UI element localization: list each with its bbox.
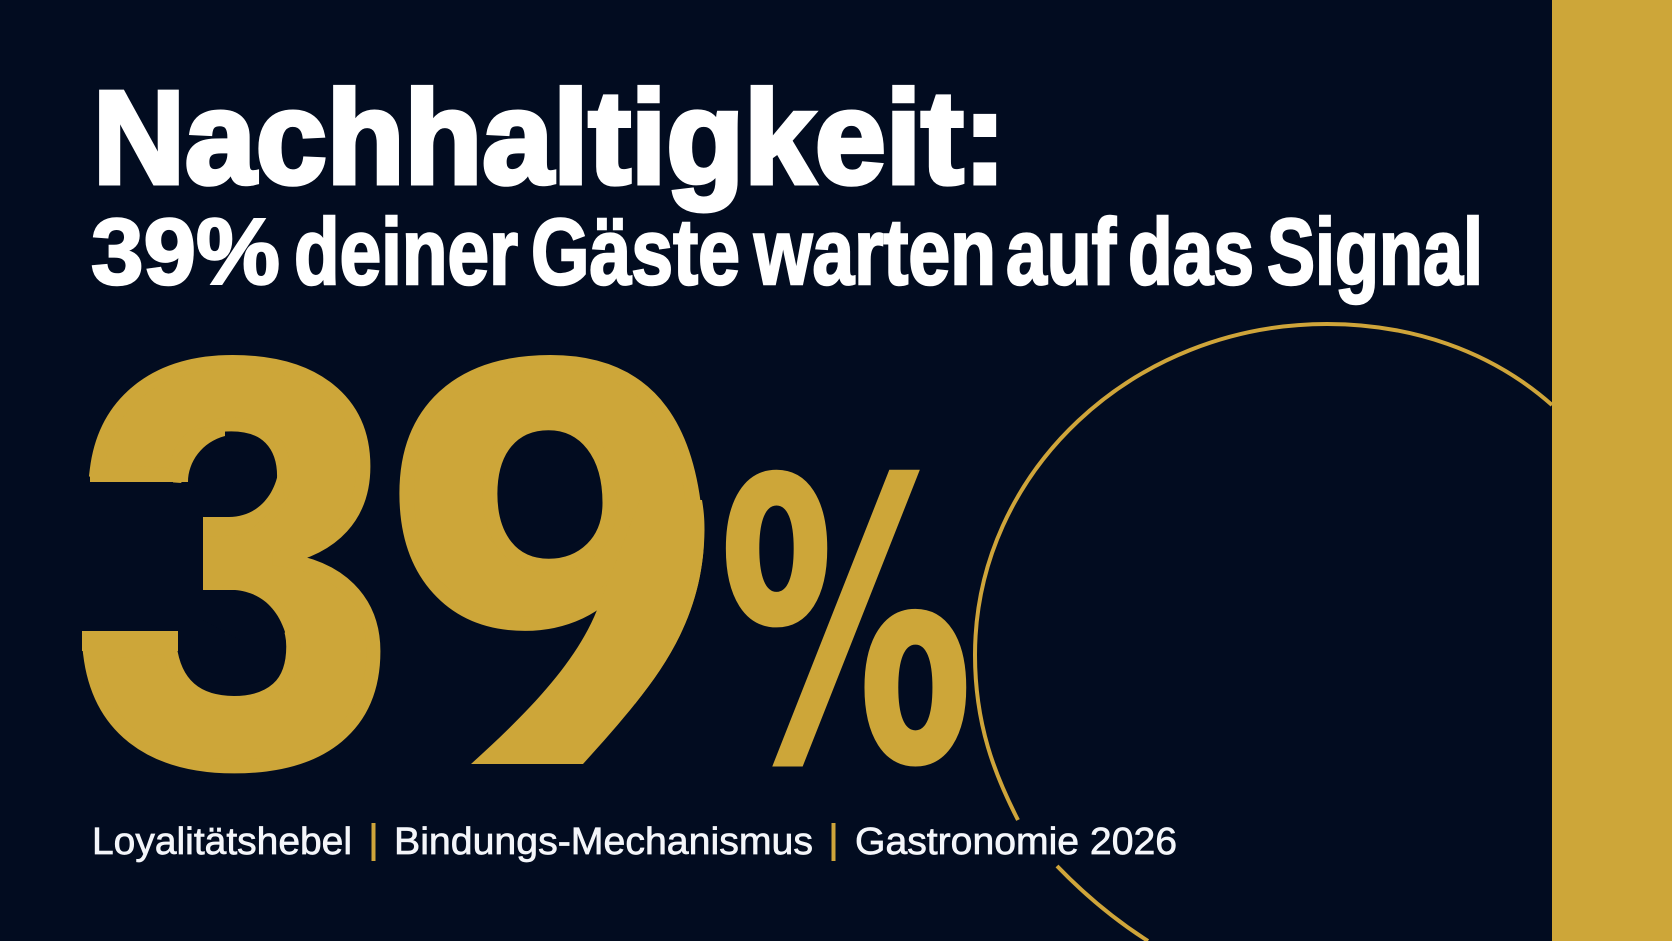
footer tags xyxy=(92,821,1177,863)
title: Nachhaltigkeit: xyxy=(93,64,1006,211)
subtitle: auf xyxy=(1006,199,1117,304)
subtitle: 39% xyxy=(91,199,280,304)
subtitle: deiner xyxy=(294,199,518,304)
tag: Bindungs-Mechanismus: Bindungs-Mechanismus xyxy=(394,821,813,863)
tag: Gastronomie 2026: Gastronomie 2026 xyxy=(855,821,1177,863)
separator 1 xyxy=(372,823,376,861)
subtitle: warten xyxy=(753,199,996,304)
subtitle xyxy=(91,199,1483,304)
percent sign: % xyxy=(719,401,973,851)
digit 3: 3 xyxy=(77,244,394,881)
big number 39% xyxy=(77,244,973,881)
decorative gold circle outline xyxy=(975,324,1552,941)
subtitle: das xyxy=(1128,199,1254,304)
gold vertical bar xyxy=(1552,0,1672,941)
subtitle: Gäste xyxy=(531,199,740,304)
tag: Loyalitätshebel: Loyalitätshebel xyxy=(92,821,352,863)
subtitle: Signal xyxy=(1267,199,1483,304)
separator 2 xyxy=(832,823,836,861)
digit 9: 9 xyxy=(386,244,719,881)
